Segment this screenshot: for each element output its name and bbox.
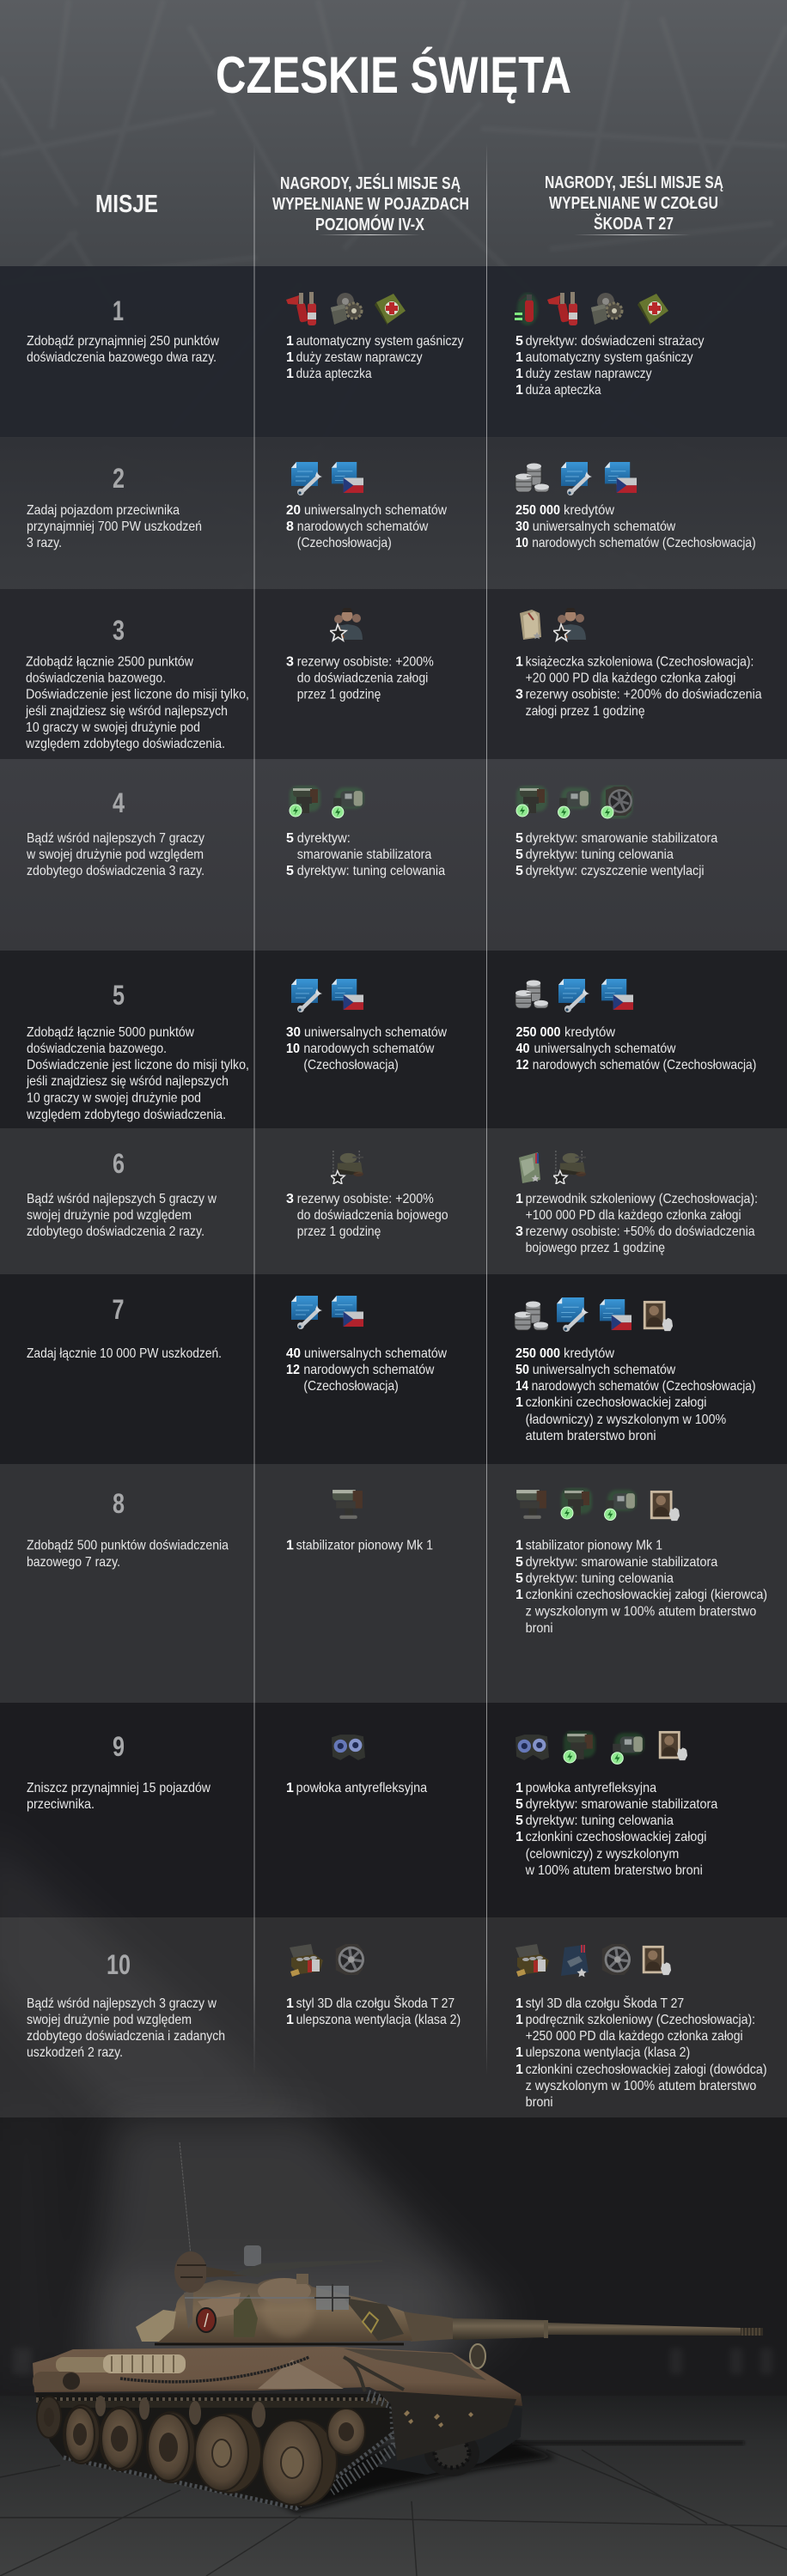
mission text: Bądź wśród najlepszych 7 graczy: [27, 831, 204, 846]
Škoda reward text: 1: [516, 654, 523, 670]
reward text: 8: [286, 519, 294, 534]
Škoda reward text: 250 000: [516, 503, 560, 518]
mission text: w swojej drużynie pod względem: [26, 848, 204, 862]
reward icons: [291, 462, 363, 495]
reward text: 30: [286, 1025, 301, 1040]
mission text: względem zdobytego doświadczenia.: [26, 1108, 226, 1122]
reward text: 5: [286, 831, 294, 846]
reward icons: [291, 979, 363, 1012]
reward text: 1: [286, 350, 294, 365]
reward text: duży zestaw naprawczy: [296, 350, 423, 365]
reward text: smarowanie stabilizatora: [297, 848, 431, 862]
Škoda reward text: 5: [516, 848, 523, 862]
reward text: uniwersalnych schematów: [304, 503, 447, 518]
Škoda reward text: [516, 1539, 767, 1636]
reward text: [286, 1025, 447, 1072]
reward text: 1: [286, 1996, 294, 2011]
Škoda reward text: atutem braterstwo broni: [526, 1429, 656, 1443]
mission text: względem zdobytego doświadczenia.: [25, 737, 225, 751]
Škoda reward text: +20 000 PD dla każdego członka załogi: [526, 671, 735, 685]
Škoda reward text: dyrektyw: smarowanie stabilizatora: [526, 831, 717, 846]
mission text: [27, 1781, 210, 1812]
mission number: 3: [113, 615, 125, 646]
Škoda reward text: 1: [516, 1192, 523, 1206]
reward text: 1: [286, 1781, 294, 1795]
commander hatch, searchlight and machine gun: [174, 2245, 382, 2293]
Škoda reward text: styl 3D dla czołgu Škoda T 27: [526, 1995, 684, 2011]
mission 4: [26, 786, 717, 878]
mission text: [27, 1192, 217, 1239]
reward text: (Czechosłowacja): [297, 536, 392, 550]
rear log and bedroll: [33, 2354, 186, 2391]
Škoda reward text: kredytów: [564, 503, 614, 518]
Škoda reward text: [516, 1346, 756, 1443]
reward text: ulepszona wentylacja (klasa 2): [296, 2013, 461, 2027]
Škoda reward text: duży zestaw naprawczy: [526, 367, 652, 381]
mission text: [26, 1025, 249, 1122]
mission 7: [27, 1294, 756, 1443]
reward text: (Czechosłowacja): [303, 1058, 399, 1072]
Škoda reward text: 40: [516, 1042, 530, 1056]
mission text: Bądź wśród najlepszych 5 graczy w: [27, 1192, 217, 1206]
column heading: rewards Škoda T 27: [545, 172, 723, 235]
Škoda reward text: narodowych schematów (Czechosłowacja): [533, 1058, 756, 1072]
Škoda reward text: 5: [516, 1797, 523, 1812]
mission text: [25, 654, 249, 751]
reward icons: [286, 292, 406, 325]
Škoda reward text: podręcznik szkoleniowy (Czechosłowacja):: [526, 2013, 755, 2027]
mission text: zdobytego doświadczenia 2 razy.: [27, 1224, 204, 1239]
column dividers: [254, 143, 487, 2075]
mission number: 5: [113, 980, 125, 1011]
reward text: 5: [286, 864, 294, 878]
Škoda reward text: 14: [516, 1379, 528, 1394]
Škoda reward text: z wyszkolonym w 100% atutem braterstwo: [526, 2079, 756, 2093]
reward text: 10: [286, 1042, 300, 1056]
Škoda reward text: 1: [516, 383, 523, 398]
reward text: [286, 503, 447, 550]
reward icons: [291, 1296, 363, 1329]
reward text: dyrektyw:: [297, 831, 351, 846]
Škoda reward text: [516, 334, 705, 398]
reward text: 3: [286, 654, 294, 670]
Škoda reward text: 1: [516, 1539, 523, 1552]
reward text: [286, 1995, 461, 2027]
Škoda reward text: uniwersalnych schematów: [533, 1363, 676, 1377]
Škoda reward icons: [516, 1731, 687, 1764]
Škoda reward text: przewodnik szkoleniowy (Czechosłowacja):: [526, 1192, 758, 1206]
mission 3: [25, 607, 762, 751]
reward icon: [330, 607, 363, 641]
Škoda reward text: rezerwy osobiste: +200% do doświadczenia: [526, 687, 762, 702]
Škoda reward icons: [516, 786, 632, 818]
gun barrel: [404, 2312, 763, 2342]
mission text: [27, 1996, 225, 2060]
mission text: jeśli znajdziesz się wśród najlepszych: [26, 1074, 229, 1089]
Škoda reward text: 5: [516, 831, 523, 846]
Škoda reward text: uniwersalnych schematów: [534, 1042, 676, 1056]
mission number: 4: [113, 787, 125, 818]
reward text: narodowych schematów: [297, 519, 429, 534]
mission rows background: [0, 266, 787, 2117]
Škoda reward text: duża apteczka: [526, 383, 601, 398]
Škoda reward text: narodowych schematów (Czechosłowacja): [532, 536, 756, 550]
mission text: Zniszcz przynajmniej 15 pojazdów: [27, 1781, 210, 1795]
Škoda reward text: ulepszona wentylacja (klasa 2): [526, 2045, 690, 2060]
mission number: 1: [113, 295, 124, 326]
reward icon: [331, 1151, 363, 1184]
Škoda reward text: w 100% atutem braterstwo broni: [525, 1863, 703, 1878]
mission 2: [27, 462, 756, 550]
header background: [0, 0, 787, 438]
reward text: [286, 1192, 448, 1239]
Škoda reward text: 3: [516, 687, 523, 702]
Škoda reward icons: [520, 607, 586, 641]
Škoda reward text: [516, 503, 756, 550]
Škoda reward text: 1: [516, 1588, 523, 1602]
Škoda reward text: 30: [516, 519, 529, 534]
reward text: [286, 654, 434, 702]
reward text: duża apteczka: [296, 367, 372, 381]
mission text: [27, 1539, 229, 1570]
Škoda reward icons: [516, 1488, 680, 1521]
reward text: [286, 334, 464, 381]
Škoda reward text: 250 000: [516, 1025, 561, 1040]
mission text: uszkodzeń 2 razy.: [27, 2045, 123, 2060]
reward text: 12: [286, 1363, 300, 1377]
reward text: narodowych schematów: [303, 1042, 435, 1056]
mission text: swojej drużynie pod względem: [27, 1208, 192, 1223]
Škoda reward text: 1: [516, 1830, 523, 1844]
Škoda reward text: [516, 831, 717, 878]
Škoda reward text: 1: [516, 2045, 523, 2060]
light rays, lower left: [0, 1829, 309, 2117]
Škoda reward text: [516, 1025, 756, 1072]
Škoda reward text: książeczka szkoleniowa (Czechosłowacja):: [526, 654, 753, 670]
Škoda reward text: członkini czechosłowackiej załogi: [526, 1830, 706, 1844]
column heading: rewards tier IV-X: POZIOMÓW IV-X: [315, 214, 425, 234]
mission number: 8: [113, 1488, 125, 1519]
Škoda reward text: kredytów: [564, 1346, 614, 1361]
reward text: 1: [286, 367, 294, 381]
tank shadow: [258, 2440, 744, 2512]
column heading: rewards Škoda T 27: NAGRODY, JEŚLI MISJE SĄ: [545, 172, 723, 192]
Škoda reward text: 5: [516, 1555, 523, 1570]
mission text: Zdobądź łącznie 2500 punktów: [26, 654, 193, 670]
mission text: przynajmniej 700 PW uszkodzeń: [27, 519, 202, 534]
Škoda reward text: dyrektyw: tuning celowania: [526, 1571, 674, 1586]
mission text: swojej drużynie pod względem: [27, 2013, 192, 2027]
reward text: dyrektyw: tuning celowania: [297, 864, 445, 878]
road wheels: [37, 2396, 365, 2506]
Škoda reward text: 50: [516, 1363, 529, 1377]
reward icons: [290, 786, 364, 817]
mission 1: [27, 292, 705, 398]
Škoda reward text: dyrektyw: smarowanie stabilizatora: [526, 1555, 717, 1570]
Škoda reward text: załogi przez 1 godzinę: [526, 704, 645, 719]
mission 8: [27, 1488, 767, 1636]
Škoda reward text: 1: [516, 1395, 523, 1410]
column heading: rewards tier IV-X: WYPEŁNIANE W POJAZDACH: [272, 195, 469, 214]
Škoda reward text: [516, 654, 762, 719]
Škoda reward text: 10: [516, 536, 528, 550]
reward text: 1: [286, 1539, 294, 1552]
reward text: 3: [286, 1192, 294, 1206]
Škoda reward text: członkini czechosłowackiej załogi: [526, 1395, 706, 1410]
Škoda reward text: 1: [516, 367, 523, 381]
mission 5: [26, 979, 756, 1122]
track: [35, 2393, 397, 2510]
reward text: 40: [286, 1346, 301, 1361]
reward icon: [332, 1735, 365, 1760]
Škoda reward text: automatyczny system gaśniczy: [526, 350, 693, 365]
mission number: 6: [113, 1148, 125, 1179]
mission 9: [27, 1731, 717, 1878]
Škoda reward text: 1: [516, 1781, 523, 1795]
reward text: uniwersalnych schematów: [304, 1025, 447, 1040]
Škoda reward icons: [519, 1151, 586, 1184]
reward text: automatyczny system gaśniczy: [296, 334, 464, 349]
mission text: Doświadczenie jest liczone do misji tylko,: [26, 687, 249, 702]
hull: [33, 2344, 522, 2461]
Škoda reward text: broni: [526, 2095, 553, 2110]
column heading: rewards Škoda T 27: ŠKODA T 27: [594, 213, 674, 234]
reward text: do doświadczenia bojowego: [297, 1208, 448, 1223]
mission text: 3 razy.: [27, 536, 62, 550]
Škoda reward text: stabilizator pionowy Mk 1: [526, 1539, 662, 1552]
mission number: 9: [113, 1731, 125, 1762]
Škoda reward text: kredytów: [564, 1025, 615, 1040]
turret stowage and badge: [136, 2284, 351, 2342]
mission text: Zdobądź łącznie 5000 punktów: [27, 1025, 194, 1040]
Škoda reward text: [516, 1781, 717, 1878]
Škoda reward icons: [515, 292, 668, 325]
Škoda reward text: 1: [516, 350, 523, 365]
mission 10: [27, 1944, 767, 2110]
reward text: przez 1 godzinę: [297, 1224, 381, 1239]
mission number: 10: [107, 1949, 131, 1980]
Škoda reward text: 1: [516, 2063, 523, 2077]
mission text: bazowego 7 razy.: [27, 1555, 120, 1570]
Škoda reward text: dyrektyw: tuning celowania: [526, 848, 674, 862]
mission text: [27, 503, 202, 550]
mission text: Zadaj łącznie 10 000 PW uszkodzeń.: [27, 1346, 222, 1361]
mission number: 7: [112, 1294, 124, 1325]
reward icon: [332, 1490, 363, 1519]
mission text: doświadczenia bazowego.: [27, 1042, 167, 1056]
Škoda reward text: rezerwy osobiste: +50% do doświadczenia: [526, 1224, 755, 1239]
Škoda reward text: bojowego przez 1 godzinę: [526, 1241, 665, 1255]
reward text: rezerwy osobiste: +200%: [297, 654, 434, 670]
reward text: przez 1 godzinę: [297, 687, 381, 702]
Škoda reward text: dyrektyw: tuning celowania: [526, 1814, 674, 1828]
Škoda reward text: 1: [516, 2013, 523, 2027]
mission text: 10 graczy w swojej drużynie pod: [26, 720, 200, 735]
column heading: rewards tier IV-X: NAGRODY, JEŚLI MISJE SĄ: [280, 173, 461, 193]
Škoda reward text: 3: [516, 1224, 523, 1239]
mission text: Zadaj pojazdom przeciwnika: [27, 503, 180, 518]
mission text: 10 graczy w swojej drużynie pod: [27, 1091, 201, 1106]
Škoda reward text: broni: [526, 1621, 553, 1636]
Škoda reward text: z wyszkolonym w 100% atutem braterstwo: [526, 1604, 756, 1619]
Škoda reward text: (ładowniczy) z wyszkolonym w 100%: [526, 1413, 726, 1427]
Škoda reward text: 12: [516, 1058, 529, 1072]
Škoda reward icons: [516, 1944, 671, 1977]
column heading: rewards tier IV-X: [272, 173, 469, 235]
mission text: doświadczenia bazowego dwa razy.: [27, 350, 217, 365]
mission text: Zdobądź przynajmniej 250 punktów: [27, 334, 219, 349]
reward text: [286, 831, 445, 878]
far-side track and wheel: [376, 2404, 522, 2476]
bottom scene backdrop: [0, 2117, 787, 2576]
turret: [155, 2278, 412, 2344]
Škoda reward text: (celowniczy) z wyszkolonym: [526, 1847, 679, 1862]
reward text: 1: [286, 2013, 294, 2027]
Škoda reward icons: [515, 1297, 673, 1332]
reward text: [286, 1346, 447, 1394]
Škoda reward text: powłoka antyrefleksyjna: [526, 1781, 656, 1795]
Škoda reward text: dyrektyw: smarowanie stabilizatora: [526, 1797, 717, 1812]
reward text: do doświadczenia załogi: [297, 671, 428, 685]
title: CZESKIE ŚWIĘTA: [216, 46, 571, 104]
mission text: zdobytego doświadczenia i zadanych: [27, 2029, 225, 2044]
Škoda reward text: uniwersalnych schematów: [533, 519, 676, 534]
reward text: 1: [286, 334, 294, 349]
Škoda reward text: 5: [516, 1571, 523, 1586]
reward text: 20: [286, 503, 301, 518]
Škoda reward icons: [516, 462, 637, 495]
mission text: doświadczenia bazowego.: [26, 671, 166, 685]
mission text: Bądź wśród najlepszych 3 graczy w: [27, 1996, 217, 2011]
Škoda reward text: 250 000: [516, 1346, 560, 1361]
reward text: (Czechosłowacja): [303, 1379, 399, 1394]
Škoda reward text: [516, 1192, 758, 1255]
Škoda reward text: 5: [516, 864, 523, 878]
mission text: Doświadczenie jest liczone do misji tylko,: [27, 1058, 249, 1072]
mission 6: [27, 1148, 758, 1255]
reward text: powłoka antyrefleksyjna: [296, 1781, 427, 1795]
Škoda reward text: [516, 1995, 767, 2110]
Škoda reward text: +100 000 PD dla każdego członka załogi: [526, 1208, 741, 1223]
reward text: uniwersalnych schematów: [304, 1346, 447, 1361]
reward text: styl 3D dla czołgu Škoda T 27: [296, 1995, 455, 2011]
mission text: Zdobądź 500 punktów doświadczenia: [27, 1539, 229, 1552]
reward icons: [290, 1944, 364, 1977]
Škoda reward text: 5: [516, 334, 523, 349]
mission number: 2: [113, 463, 125, 494]
Škoda reward text: 1: [516, 1996, 523, 2011]
mission text: [27, 334, 219, 365]
Škoda reward text: +250 000 PD dla każdego członka załogi: [526, 2029, 743, 2044]
Škoda reward text: dyrektyw: doświadczeni strażacy: [526, 334, 705, 349]
antenna: [180, 2142, 191, 2255]
Škoda reward text: dyrektyw: czyszczenie wentylacji: [526, 864, 705, 878]
mission text: [26, 831, 204, 878]
column heading: missions: MISJE: [95, 191, 158, 218]
Škoda reward icons: [516, 979, 633, 1012]
reward text: stabilizator pionowy Mk 1: [296, 1539, 433, 1552]
column heading: rewards Škoda T 27: WYPEŁNIANE W CZOŁGU: [549, 194, 718, 213]
reward text: rezerwy osobiste: +200%: [297, 1192, 434, 1206]
tank illustration: Škoda T 27: [33, 2142, 763, 2512]
Škoda reward text: 5: [516, 1814, 523, 1828]
Škoda reward text: narodowych schematów (Czechosłowacja): [532, 1379, 756, 1394]
reward text: narodowych schematów: [303, 1363, 435, 1377]
mission text: jeśli znajdziesz się wśród najlepszych: [25, 704, 228, 719]
mission text: przeciwnika.: [27, 1797, 95, 1812]
mission text: zdobytego doświadczenia 3 razy.: [27, 864, 204, 878]
